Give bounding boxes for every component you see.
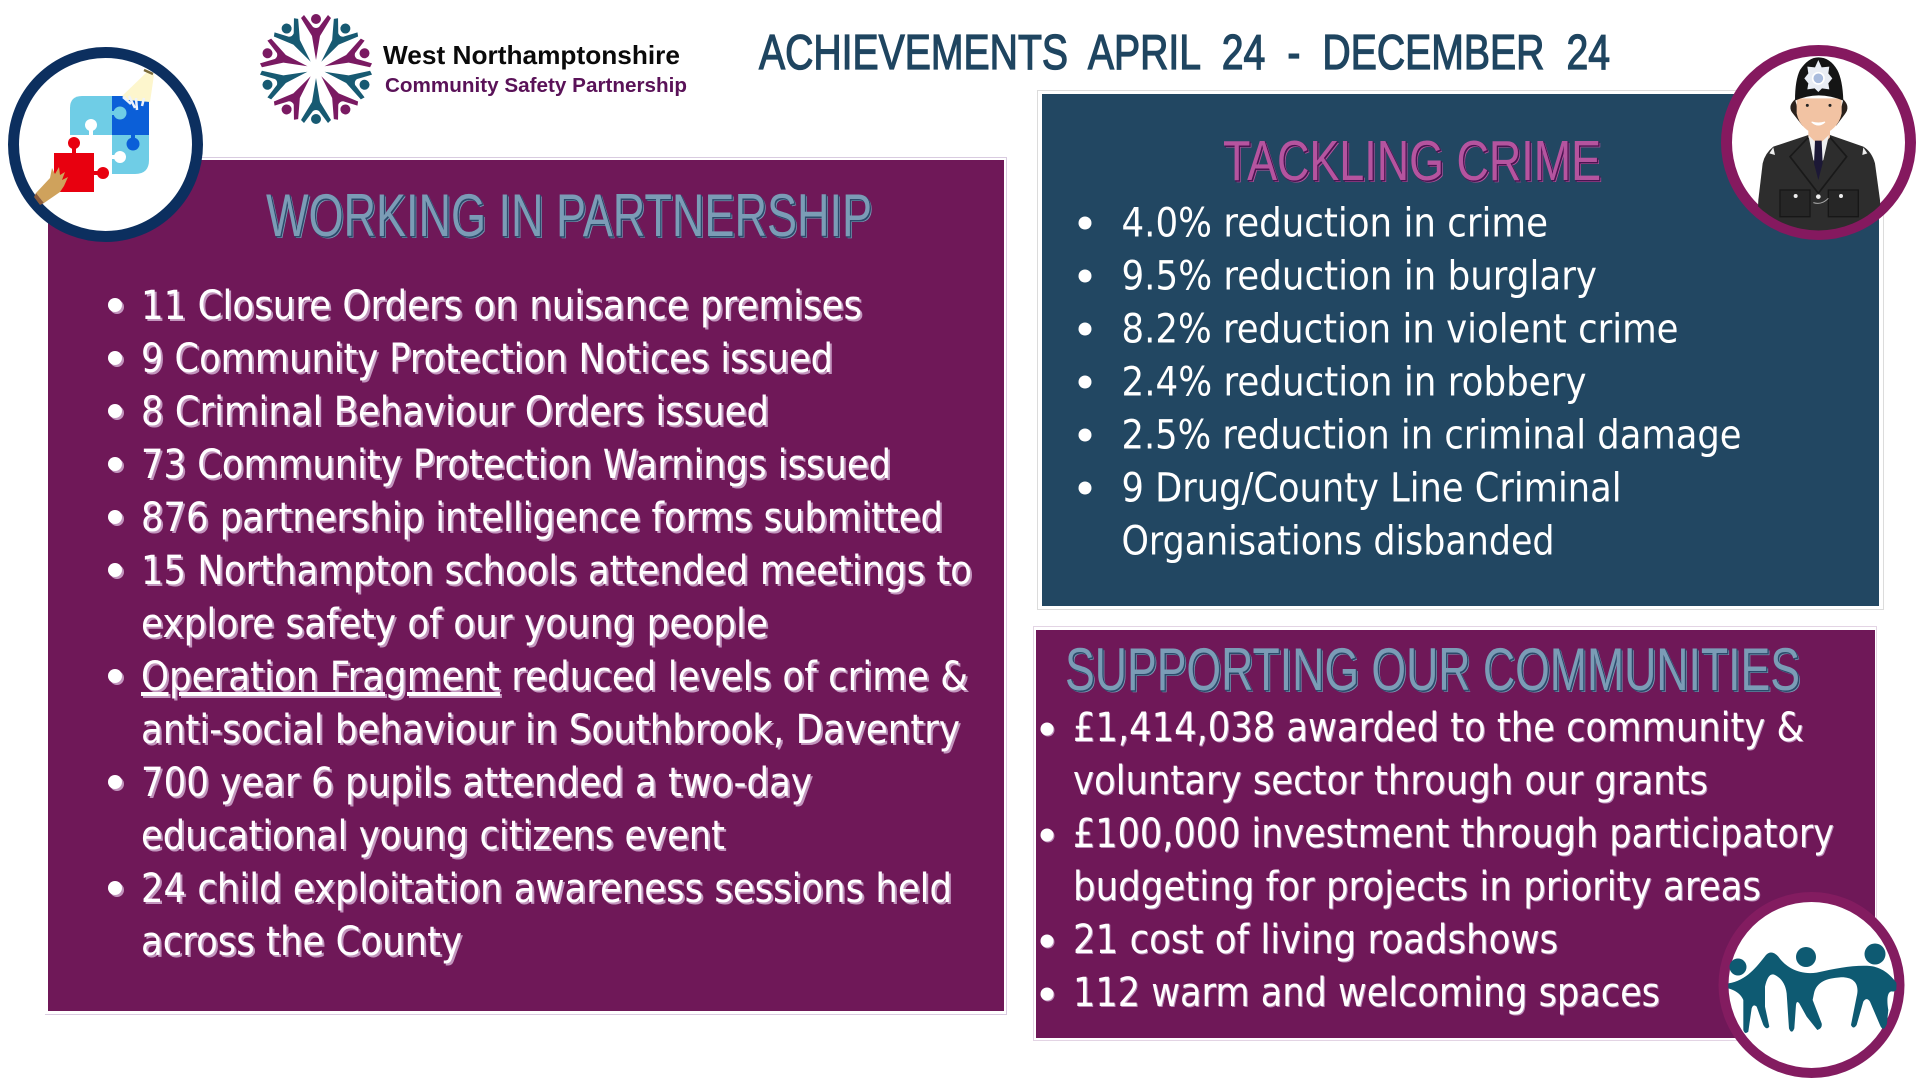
list: crime reductions (1078, 200, 1742, 564)
officer body (1757, 135, 1882, 237)
item: year 6 pupils: 700 year 6 pupils attended a two-day (141, 760, 812, 806)
logo emblem: ring of ten figures (258, 14, 374, 124)
item: participatory budgeting: £100,000 investment through participatory (1073, 811, 1834, 857)
buttons and chain (1794, 194, 1798, 198)
list: community support (1040, 705, 1834, 1016)
puzzle knobs (85, 106, 140, 163)
item: participatory budgeting: budgeting for projects in priority areas (1073, 864, 1761, 910)
item: warm spaces: 112 warm and welcoming spaces (1073, 970, 1660, 1016)
item: roadshows: 21 cost of living roadshows (1073, 917, 1558, 963)
item: operation fragment: Operation Fragment reduced levels of crime & (141, 654, 968, 700)
item: robbery: 2.4% reduction in robbery (1122, 360, 1586, 406)
helmet (1795, 57, 1843, 101)
light beam and hand: top right (122, 71, 154, 102)
lapels (1790, 137, 1847, 193)
item: county lines (1078, 466, 1622, 564)
item: burglary: 9.5% reduction in burglary (1122, 254, 1597, 300)
puzzle piece: blue top right (112, 96, 149, 135)
item: grants (1040, 705, 1804, 804)
item: intelligence forms: 876 partnership intelligence forms submitted (141, 495, 943, 541)
panel: working in partnership (45, 157, 1007, 1015)
item: schools: explore safety of our young people (141, 601, 768, 647)
item: county lines: Organisations disbanded (1122, 518, 1554, 564)
heading: tackling crime: TACKLING CRIME (1224, 130, 1602, 194)
item: operation fragment (108, 654, 968, 753)
item: child exploitation sessions (108, 866, 952, 965)
hand: tan (36, 167, 68, 203)
item: year 6 pupils (108, 760, 812, 859)
item: community protection warnings: 73 Community Protection Warnings issued (141, 442, 891, 488)
title: ACHIEVEMENTS APRIL 24 - DECEMBER 24 (759, 26, 1610, 80)
heading: working in partnership: WORKING IN PARTNERSHIP (267, 183, 873, 250)
panel: tackling crime (1038, 90, 1884, 610)
panel: supporting our communities (1034, 626, 1876, 1040)
item: grants: voluntary sector through our grants (1073, 758, 1708, 804)
logo: West Northamptonshire Community Safety Partnership (258, 14, 687, 124)
item: community protection notices: 9 Community Protection Notices issued (141, 336, 833, 382)
icon: police officer in circle (1726, 50, 1910, 237)
tie (1814, 141, 1823, 180)
pockets (1780, 190, 1858, 217)
item: criminal damage: 2.5% reduction in criminal damage (1122, 412, 1742, 458)
epaulettes (1769, 147, 1867, 155)
heading: working in partnership: WORKING IN PARTNERSHIP (266, 182, 872, 249)
helmet badge (1804, 60, 1832, 92)
icon: puzzle pieces in circle (14, 52, 198, 236)
puzzle piece: light blue top left (70, 96, 112, 135)
icon: people holding hands in circle (1724, 897, 1900, 1073)
item: closure orders: 11 Closure Orders on nuisance premises (141, 283, 862, 329)
item: crime: 4.0% reduction in crime (1122, 200, 1548, 246)
item: violent crime: 8.2% reduction in violent crime (1122, 306, 1678, 352)
item: county lines: 9 Drug/County Line Criminal (1122, 466, 1622, 512)
logo subtitle: Community Safety Partnership (385, 74, 687, 97)
heading: working in partnership: WORKING IN PARTNERSHIP (268, 184, 874, 251)
item: child exploitation sessions: across the County (141, 919, 462, 965)
puzzle piece: red (54, 148, 99, 192)
item: schools (108, 548, 972, 647)
item: criminal behaviour orders: 8 Criminal Behaviour Orders issued (141, 389, 769, 435)
list: partnership achievements (108, 283, 972, 965)
heading: tackling crime: TACKLING CRIME (1225, 131, 1603, 195)
face (1796, 98, 1842, 131)
puzzle piece: light blue bottom right (112, 135, 149, 174)
item: operation fragment: anti-social behaviour in Southbrook, Daventry (141, 707, 960, 753)
hair sides (1790, 99, 1847, 126)
neck (1808, 130, 1830, 142)
item: year 6 pupils: educational young citizens event (141, 813, 725, 859)
heading: tackling crime: TACKLING CRIME (1223, 129, 1601, 193)
item: grants: £1,414,038 awarded to the community & (1073, 705, 1804, 751)
logo name: West Northamptonshire (383, 40, 680, 70)
item: child exploitation sessions: 24 child exploitation awareness sessions held (141, 866, 952, 912)
collar (1808, 135, 1829, 161)
item: participatory budgeting (1040, 811, 1834, 910)
item: schools: 15 Northampton schools attended meetings to (141, 548, 972, 594)
